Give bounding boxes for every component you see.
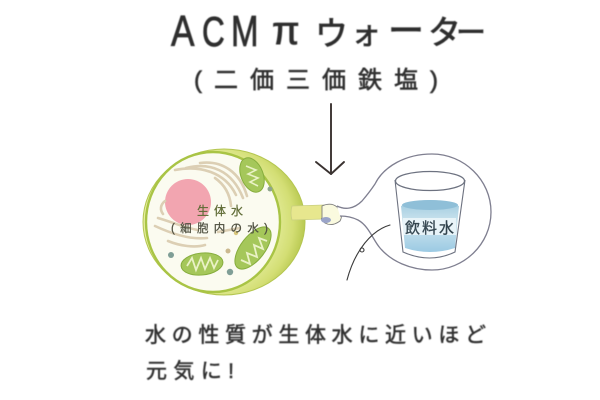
title: A <box>171 7 195 56</box>
caption line 2: 元気に! <box>146 360 234 383</box>
label: drinking water: 飲料水 <box>405 220 454 237</box>
caption line 1: 水の性質が生体水に近いほど <box>145 324 486 347</box>
inner cytoplasm <box>146 152 280 292</box>
title <box>171 7 486 56</box>
tube from cell with hand <box>291 204 341 225</box>
endoplasmic reticulum <box>155 163 247 246</box>
title: ウ <box>315 15 348 52</box>
mitochondrion lower right <box>228 221 278 275</box>
title: π <box>272 9 300 53</box>
nucleus <box>165 179 211 225</box>
outer cell body <box>143 149 305 295</box>
title: ォ <box>351 18 381 51</box>
title: M <box>231 8 258 56</box>
label: body water: 生体水 <box>197 204 243 218</box>
label: intracellular water: (細胞内の水) <box>171 221 268 235</box>
mitochondrion top right <box>235 154 269 196</box>
title: ー <box>456 17 486 50</box>
vesicles <box>168 186 272 275</box>
glass outline <box>395 180 465 258</box>
arrow <box>316 104 344 174</box>
glass rim <box>396 172 464 190</box>
subtitle: (二価三価鉄塩) <box>194 67 438 94</box>
water <box>401 200 459 252</box>
glass of drinking water <box>395 172 465 258</box>
mitochondrion bottom <box>180 251 224 277</box>
title: ー <box>388 10 424 51</box>
water top <box>402 200 458 210</box>
title: タ <box>428 14 461 51</box>
string curve <box>347 225 390 280</box>
cell illustration <box>143 149 305 295</box>
label strip <box>403 218 456 235</box>
title: C <box>202 8 225 55</box>
magnified bubble <box>337 154 491 270</box>
